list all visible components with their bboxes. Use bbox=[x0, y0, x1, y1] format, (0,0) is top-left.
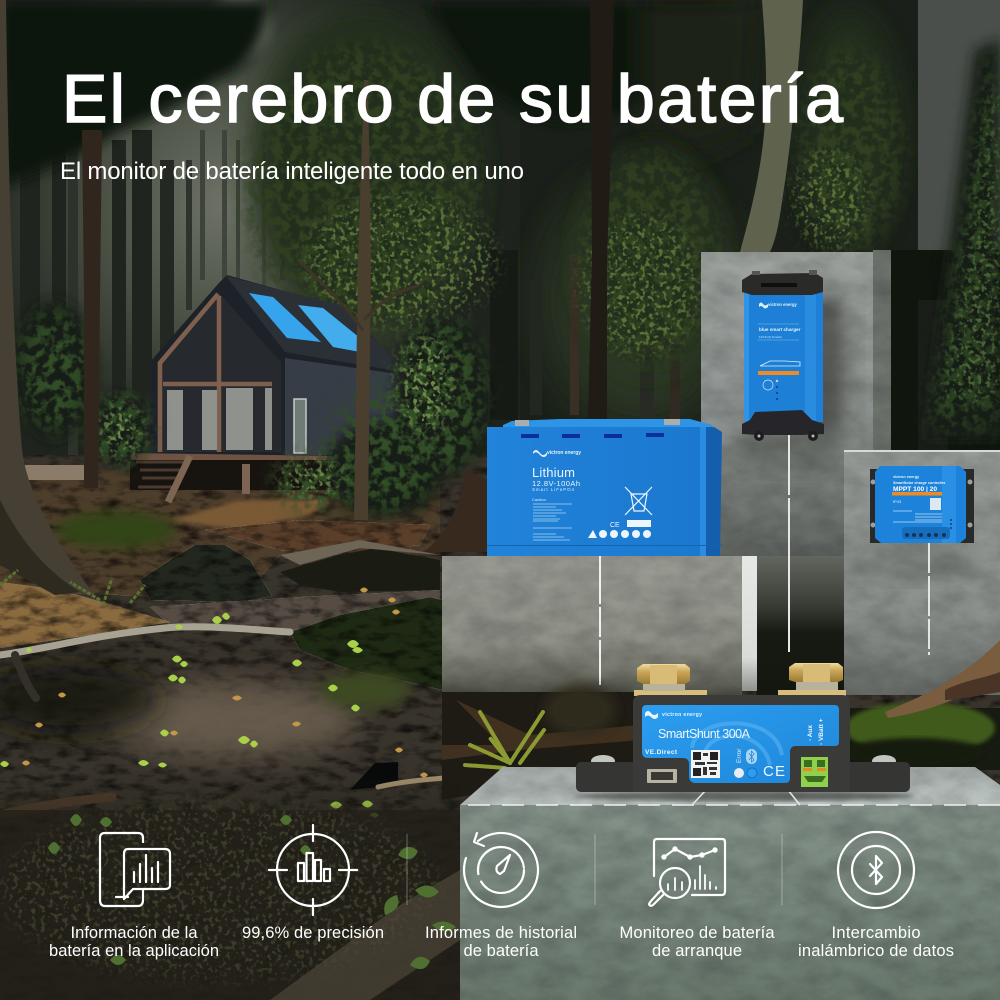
shunt bluetooth badge bbox=[746, 749, 757, 764]
icon: history gauge bbox=[464, 833, 538, 907]
shunt right washer bbox=[796, 682, 838, 690]
orange litter patch bbox=[0, 582, 170, 648]
label: wireless exchange: Intercambio bbox=[832, 924, 920, 942]
battery front bbox=[487, 427, 700, 556]
concrete block: foreground bbox=[460, 767, 1000, 1000]
tree: left large trunk bbox=[0, 0, 92, 595]
distant forest trunks bbox=[20, 100, 680, 480]
concrete block: tall bbox=[701, 250, 891, 582]
ground detail: root and branches bbox=[0, 627, 445, 815]
shunt CE mark: CE bbox=[763, 763, 785, 780]
dark hollow upper left bbox=[0, 665, 160, 735]
ground bbox=[0, 455, 1000, 1000]
shunt green terminal bbox=[801, 757, 828, 787]
shunt VE.Direct label: VE.Direct bbox=[645, 749, 678, 756]
mppt back plate bbox=[870, 469, 974, 543]
cabin: stairs bbox=[136, 456, 190, 502]
moss clump bbox=[320, 672, 410, 708]
device: SmartShunt 300A bbox=[576, 663, 910, 792]
concrete block: right bbox=[844, 450, 1000, 695]
dirt path band bbox=[150, 590, 440, 630]
tree: thin left trunk bbox=[82, 130, 102, 488]
charger chart bbox=[760, 361, 800, 366]
label: app info bbox=[49, 924, 219, 960]
mppt body bbox=[875, 466, 966, 543]
tree: light trunk upper right bbox=[740, 0, 803, 252]
cabin: curtains bbox=[167, 388, 272, 450]
device: blue smart charger bbox=[742, 270, 840, 441]
cabin: solar panel right bbox=[298, 305, 360, 352]
label: starter monitoring: Monitoreo de batería bbox=[620, 924, 775, 942]
title: El cerebro de su batería bbox=[62, 61, 843, 137]
label: starter monitoring: de arranque bbox=[652, 942, 742, 960]
charger body bbox=[744, 290, 823, 422]
battery fine print bbox=[533, 504, 572, 540]
tree: far right trunk and pine bbox=[891, 0, 1000, 450]
charger mounting feet bbox=[754, 431, 764, 441]
cabin: deck bbox=[130, 453, 340, 462]
label: wireless exchange bbox=[798, 924, 954, 960]
shunt logo: victron energy bbox=[662, 712, 702, 718]
shunt ripple mark bbox=[692, 723, 782, 765]
icon: wireless bluetooth bbox=[838, 832, 914, 908]
device: lithium battery: Smart LiFePO4 bbox=[532, 487, 574, 492]
icon: phone with chat chart bbox=[100, 833, 170, 906]
brown slope bbox=[205, 520, 430, 555]
shunt model name: SmartShunt 300A bbox=[658, 727, 751, 741]
grey upper path bbox=[280, 540, 440, 565]
cabin: small window bbox=[294, 399, 306, 453]
subtitle: El monitor de batería inteligente todo en uno bbox=[60, 158, 524, 185]
device: lithium battery: 12.8V-100Ah bbox=[532, 479, 580, 488]
bushes around cabin bbox=[15, 300, 486, 518]
label: history reports: Informes de historial bbox=[425, 924, 577, 942]
moss patch bbox=[55, 512, 175, 548]
battery compliance marks: CE bbox=[610, 522, 620, 529]
dark hole bbox=[350, 762, 398, 790]
white thread on right block bbox=[928, 543, 930, 655]
white thread down tall block bbox=[788, 435, 790, 655]
moss hillside bbox=[290, 597, 442, 690]
background: forest sky haze bbox=[0, 0, 1000, 620]
battery terminals bbox=[515, 420, 529, 426]
charger shadow bbox=[800, 300, 840, 430]
icon: precision target bbox=[269, 825, 357, 915]
label: wireless exchange: inalámbrico de datos bbox=[798, 942, 954, 960]
dividers between features bbox=[407, 834, 782, 905]
device: blue smart charger: 12/15 (3) Tensión bbox=[759, 335, 782, 339]
shunt terminal labels: - Aux bbox=[807, 725, 814, 741]
charger orange bar bbox=[758, 371, 799, 375]
shunt right bolt bbox=[789, 663, 843, 682]
moss and roots right of shunt bbox=[845, 640, 1000, 770]
upper tree foliage bbox=[0, 0, 900, 370]
battery side bbox=[700, 427, 722, 556]
shunt left screw bbox=[591, 755, 615, 767]
mppt labels: IP43 bbox=[893, 499, 902, 504]
white cables from shunt bbox=[692, 790, 800, 805]
diagonal log bbox=[270, 870, 460, 1000]
charger bottom cap bbox=[742, 410, 824, 435]
charger top cap bbox=[742, 273, 823, 295]
cabin: front gable bbox=[157, 292, 281, 452]
shunt housing bbox=[633, 695, 850, 792]
device: lithium battery bbox=[487, 419, 722, 556]
ground base bbox=[0, 455, 1000, 1000]
label: history reports bbox=[425, 924, 577, 960]
tree branches over cabin bbox=[300, 262, 420, 330]
cabin: post bbox=[242, 464, 250, 494]
label: app info: Información de la bbox=[70, 924, 198, 942]
shunt Error label: Error bbox=[736, 748, 743, 763]
shunt copper rails bbox=[634, 690, 707, 696]
sandy clearing bbox=[25, 465, 90, 480]
device: lithium battery: Caution bbox=[532, 497, 546, 502]
battery lid bbox=[503, 419, 712, 432]
device: blue smart charger: blue smart charger bbox=[759, 327, 801, 332]
mppt LEDs bbox=[950, 519, 952, 521]
battery logo: victron energy bbox=[547, 450, 581, 456]
rock mound bbox=[140, 545, 272, 602]
cabin: solar panel left bbox=[249, 293, 321, 342]
label: accuracy: 99,6% de precisión bbox=[242, 924, 384, 942]
device: SmartShunt 300A: - VBatt + bbox=[818, 718, 825, 745]
cabin: side wall bbox=[285, 358, 405, 455]
shunt blue panel bbox=[642, 705, 839, 783]
mppt orange bar bbox=[892, 492, 942, 496]
label: starter monitoring bbox=[620, 924, 775, 960]
shunt LEDs bbox=[734, 768, 744, 778]
icon: starter battery monitor chart bbox=[649, 839, 725, 906]
ferns bbox=[0, 570, 145, 605]
label: app info: batería en la aplicación bbox=[49, 942, 219, 960]
charger label bbox=[758, 324, 799, 340]
fern bbox=[465, 712, 544, 768]
dark gap behind middle block bbox=[756, 556, 844, 696]
battery labels: Lithium bbox=[532, 465, 575, 480]
foreground lower plants bbox=[0, 800, 460, 1000]
mppt connector row bbox=[902, 527, 950, 539]
shunt USB port bbox=[647, 769, 677, 783]
tree: foreground thin trunk bbox=[354, 80, 371, 520]
tree: central dark trunk bbox=[588, 0, 614, 420]
battery recycle symbol bbox=[625, 487, 652, 515]
dark mound bbox=[280, 548, 440, 592]
pale root bbox=[0, 627, 290, 655]
mppt text: victron energy bbox=[893, 475, 920, 479]
cabin: roof bbox=[226, 276, 408, 373]
device: MPPT charge controller bbox=[870, 466, 974, 543]
dark canopy bbox=[0, 0, 270, 190]
bright leaves scattered on the ground bbox=[0, 588, 428, 818]
lit dirt hollow bbox=[100, 682, 360, 758]
shunt right screw bbox=[872, 755, 896, 767]
upper forest litter bbox=[0, 470, 440, 600]
device: MPPT charge controller: MPPT 100 | 20 bbox=[893, 486, 937, 493]
orange path bbox=[170, 500, 330, 530]
shunt left bolt bbox=[637, 664, 690, 684]
bottom scrim over forest floor bbox=[0, 770, 460, 1000]
shunt left washer bbox=[643, 683, 685, 691]
battery slots bbox=[521, 433, 664, 438]
charger logo: victron energy bbox=[768, 302, 798, 307]
concrete block: middle bbox=[442, 556, 757, 696]
device: MPPT charge controller: SmartSolar charge controller bbox=[893, 481, 946, 485]
cabin: timber frame bbox=[160, 294, 272, 452]
plants and dark ground left of shunt bbox=[442, 684, 640, 800]
shunt QR code bbox=[691, 750, 720, 778]
shunt base plate bbox=[576, 762, 910, 792]
central tree canopy bbox=[250, 10, 900, 370]
charger button and LEDs bbox=[763, 380, 773, 390]
tree stump bbox=[424, 470, 488, 552]
cabin bbox=[130, 275, 408, 502]
label: history reports: de batería bbox=[464, 942, 539, 960]
